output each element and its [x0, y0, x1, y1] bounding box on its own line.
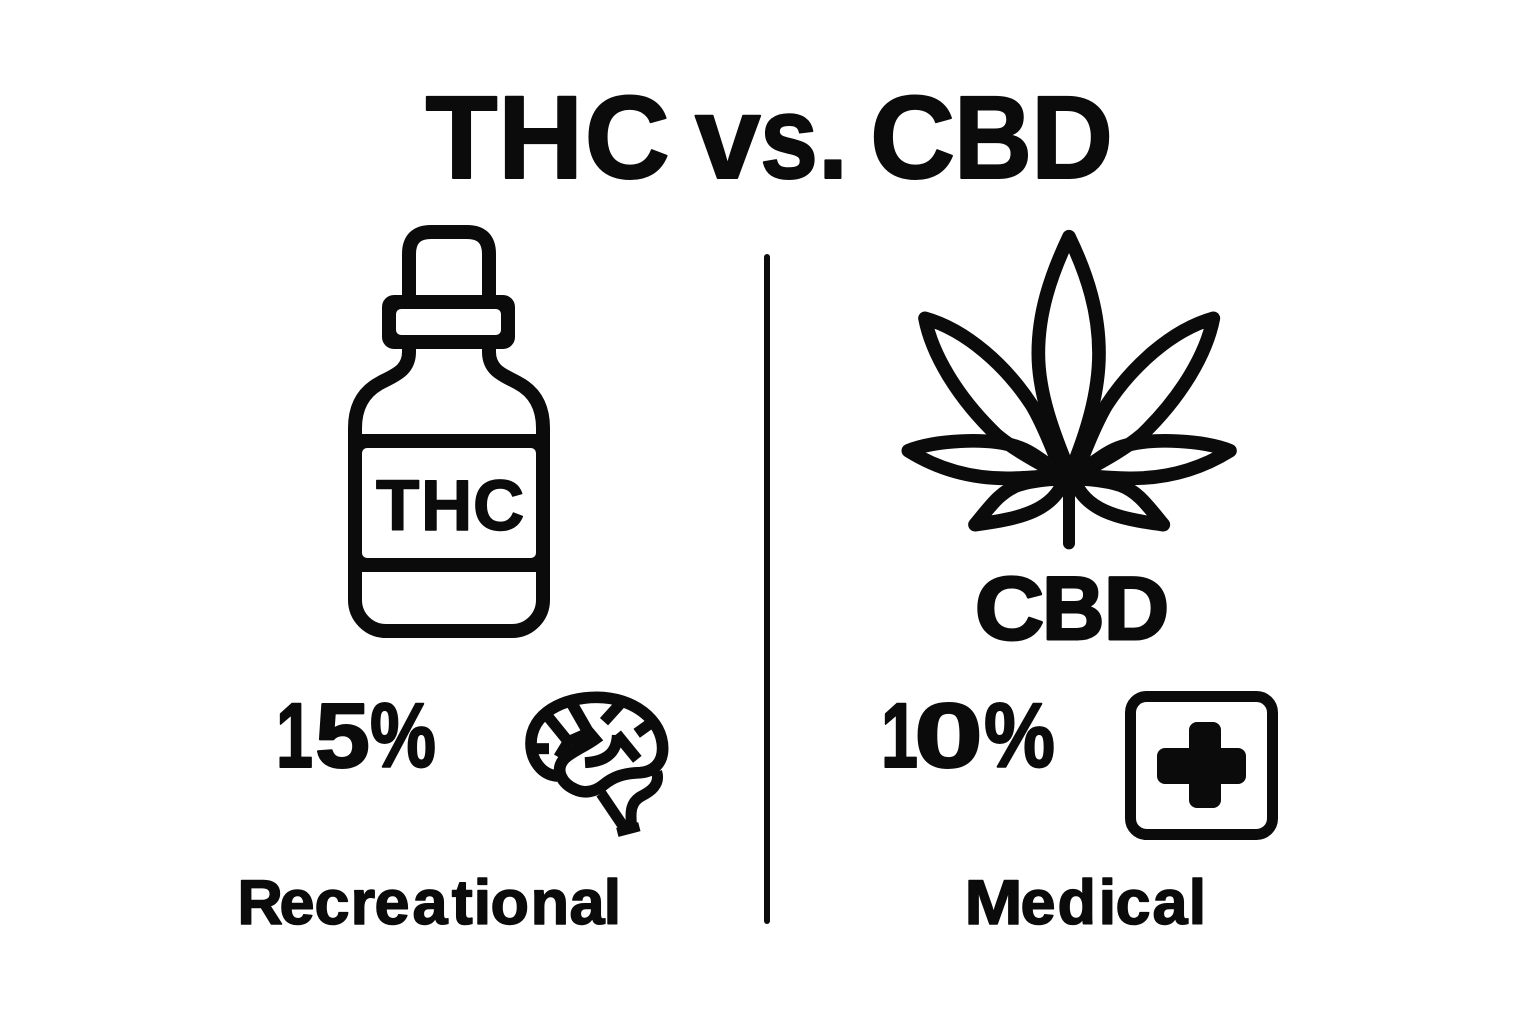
stat: 15%: 5: [315, 685, 370, 787]
panel: THC: [237, 232, 663, 938]
icon: cannabis leaf: [908, 237, 1230, 543]
stat: 15%: %: [370, 685, 436, 787]
title: s: [760, 72, 818, 204]
icon: THC dropper bottle: [355, 232, 543, 631]
stat: 10%: %: [984, 685, 1055, 787]
bottle label text: THC: [376, 467, 524, 546]
stat: 15%: 1: [276, 685, 313, 787]
label: CBD: D: [1104, 558, 1169, 658]
stat: 10%: 0: [914, 685, 983, 787]
label: Medical: M: [964, 868, 1022, 938]
icon: medical cross in square: [1130, 696, 1272, 834]
title: C: [850, 72, 955, 204]
title: THC v: [426, 72, 761, 204]
label: Recreational: Recreational: [237, 868, 621, 938]
label: CBD: B: [1042, 558, 1104, 658]
label: CBD: C: [975, 558, 1044, 658]
panel: CBD: [881, 237, 1272, 938]
title: D: [1031, 72, 1113, 204]
title: .: [818, 72, 848, 204]
title: B: [954, 72, 1032, 204]
divider between THC and CBD columns: [764, 257, 770, 921]
label: Medical: edical: [1020, 868, 1206, 938]
icon: brain: [531, 697, 663, 832]
stat: 10%: 1: [881, 685, 918, 787]
